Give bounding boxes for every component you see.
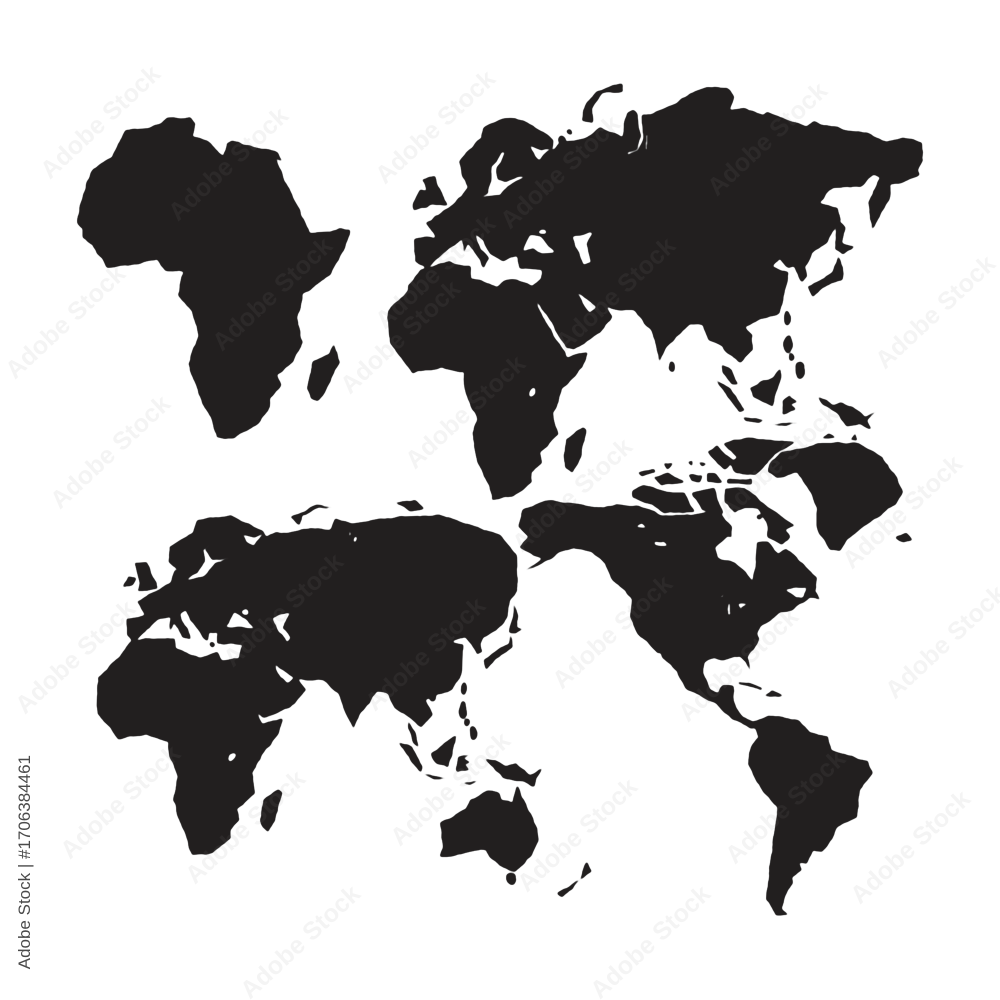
watermark: stock marks: Adobe Stock: [400, 350, 531, 474]
watermark: stock marks: Adobe Stock: [0, 260, 131, 384]
watermark: stock marks: Adobe Stock: [45, 390, 176, 514]
watermark: stock marks: Adobe Stock: [10, 595, 141, 719]
map: Americas: [518, 432, 913, 915]
map: Greenland: [768, 443, 902, 550]
watermark: stock marks: Adobe Stock: [218, 548, 349, 672]
watermark: stock marks: Adobe Stock: [55, 740, 186, 864]
watermark: stock marks: Adobe Stock: [837, 450, 968, 574]
watermark: stock marks: Adobe Stock: [673, 603, 804, 727]
watermark: stock marks: Adobe Stock: [720, 745, 851, 869]
watermark: stock marks: Adobe Stock: [207, 232, 338, 356]
watermark: stock marks: Adobe Stock: [550, 232, 681, 356]
map: Italy and Crete lower: [173, 615, 215, 648]
watermark: stock marks: Adobe Stock: [512, 773, 643, 897]
watermark: stock marks: Adobe Stock: [495, 110, 626, 234]
watermark: stock marks: Adobe Stock: [507, 433, 638, 557]
map: New Zealand: [557, 862, 592, 898]
map: water details Americas: [636, 510, 808, 677]
map: Eurasia and Africa lower: [97, 500, 592, 898]
watermark: stock marks: Adobe Stock: [335, 275, 466, 399]
watermark: stock marks: Adobe Stock: [385, 727, 516, 851]
watermark: stock marks: Adobe Stock: [370, 65, 501, 189]
watermark: stock marks: Adobe Stock: [547, 570, 678, 694]
watermark: stock marks: Adobe Stock: [360, 592, 491, 716]
watermark: stock marks: Adobe Stock: [163, 102, 294, 226]
watermark: stock marks: Adobe Stock: [180, 765, 311, 889]
side stock number: Adobe Stock | #1706384461: [15, 755, 34, 969]
watermark: stock marks: Adobe Stock: [713, 400, 844, 524]
watermark: stock marks: Adobe Stock: [845, 785, 976, 909]
map: Australia: [440, 785, 538, 872]
watermark: stock marks: Adobe Stock: [370, 210, 501, 334]
map: water details upper: [428, 113, 648, 398]
watermark: stock marks: Adobe Stock: [35, 60, 166, 184]
map: Baffin detail: [756, 514, 762, 520]
map: Africa large: [77, 117, 350, 438]
watermark: stock marks: Adobe Stock: [702, 77, 833, 201]
watermark: stock marks: Adobe Stock: [870, 250, 1000, 374]
map: Madagascar upper: [563, 427, 587, 473]
map: water details lower: [137, 525, 356, 763]
map: Eurasia and Africa upper: [388, 84, 923, 500]
